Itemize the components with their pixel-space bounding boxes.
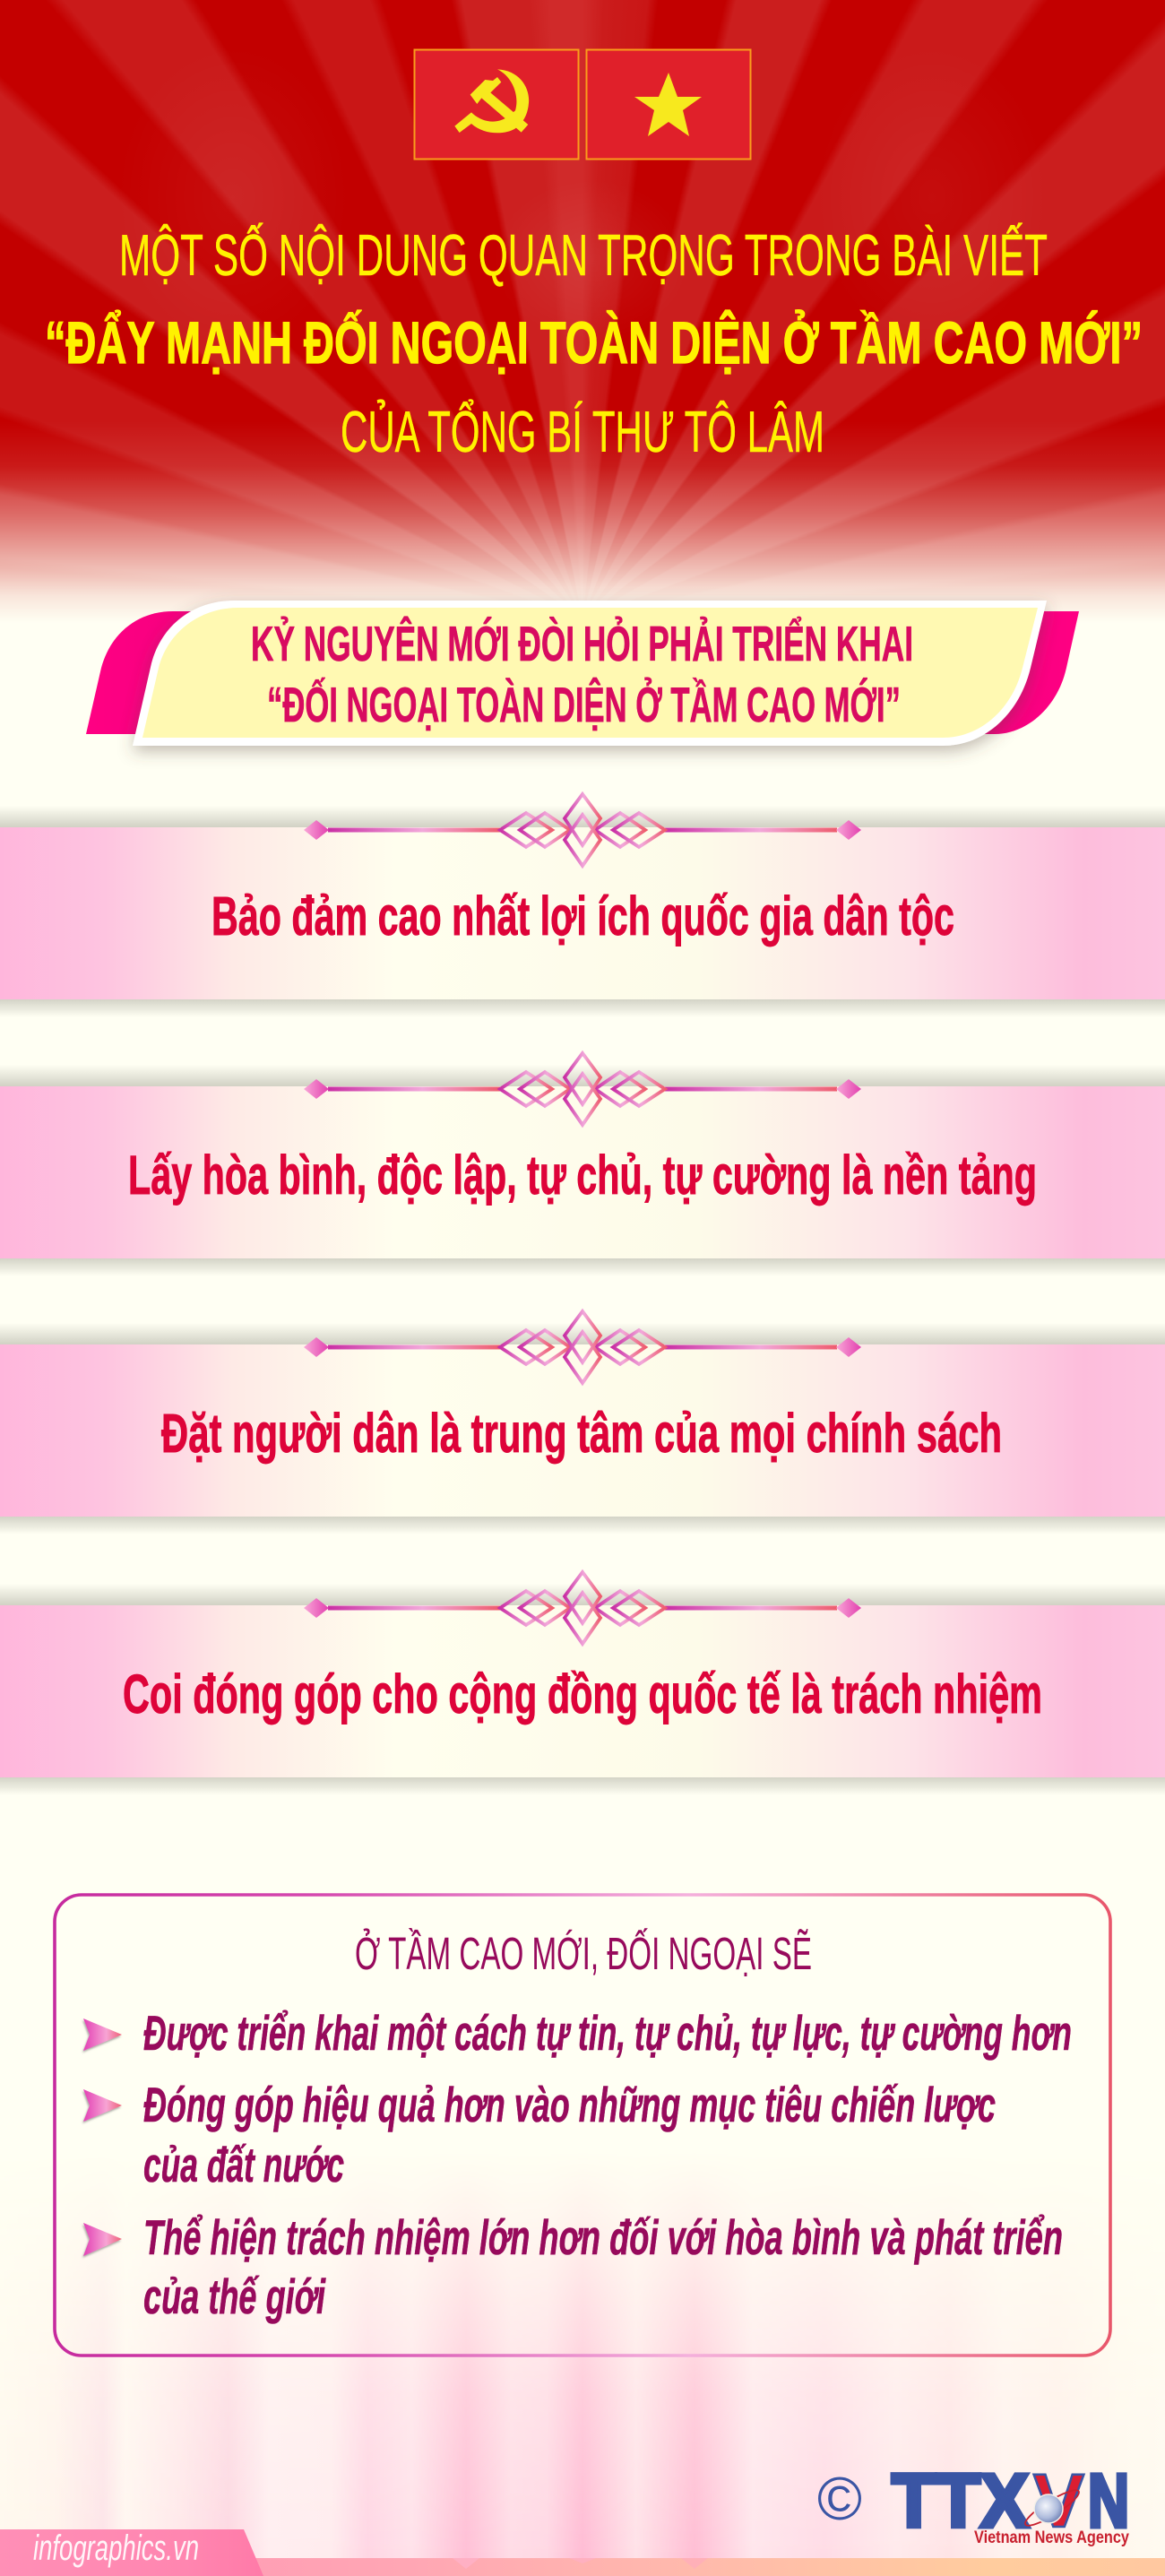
footer strip xyxy=(0,2558,1165,2576)
ribbon right fold xyxy=(932,611,1079,734)
agency logo xyxy=(892,2459,1129,2547)
flags xyxy=(414,50,751,160)
flag: party hammer and sickle xyxy=(414,50,579,160)
bullet 3: của thế giới xyxy=(143,2269,326,2324)
agency logo: V xyxy=(1033,2459,1084,2543)
ribbon text xyxy=(251,616,913,732)
panel: principle 4 xyxy=(0,1572,1165,1795)
box heading: Ở TẦM CAO MỚI, ĐỐI NGOẠI SẼ xyxy=(355,1927,812,1979)
panel: principle 1 xyxy=(0,794,1165,1017)
bullet 2: của đất nước xyxy=(143,2137,344,2192)
flag: gold star xyxy=(586,50,751,160)
title xyxy=(45,222,1143,464)
panel: principle 2 xyxy=(0,1053,1165,1276)
ribbon heading xyxy=(86,601,1079,746)
ribbon white plate xyxy=(133,601,1047,746)
copyright mark: © xyxy=(817,2465,862,2533)
source tab: infographics.vn xyxy=(33,2528,199,2568)
red sunburst header background xyxy=(0,0,1165,627)
agency logo: Vietnam News Agency xyxy=(974,2528,1129,2547)
bullet 3 xyxy=(83,2209,1063,2324)
ribbon left fold xyxy=(86,611,269,734)
ribbon yellow plate xyxy=(142,608,1038,738)
panel: principle 3 xyxy=(0,1311,1165,1534)
pink curtain background xyxy=(22,2194,1111,2558)
panel: at the new height xyxy=(55,1895,1110,2356)
title: CỦA TỔNG BÍ THƯ TÔ LÂM xyxy=(341,399,824,464)
agency logo: TTX xyxy=(892,2459,1029,2543)
agency logo: N xyxy=(1088,2459,1129,2543)
bullet 2 xyxy=(83,2077,996,2192)
